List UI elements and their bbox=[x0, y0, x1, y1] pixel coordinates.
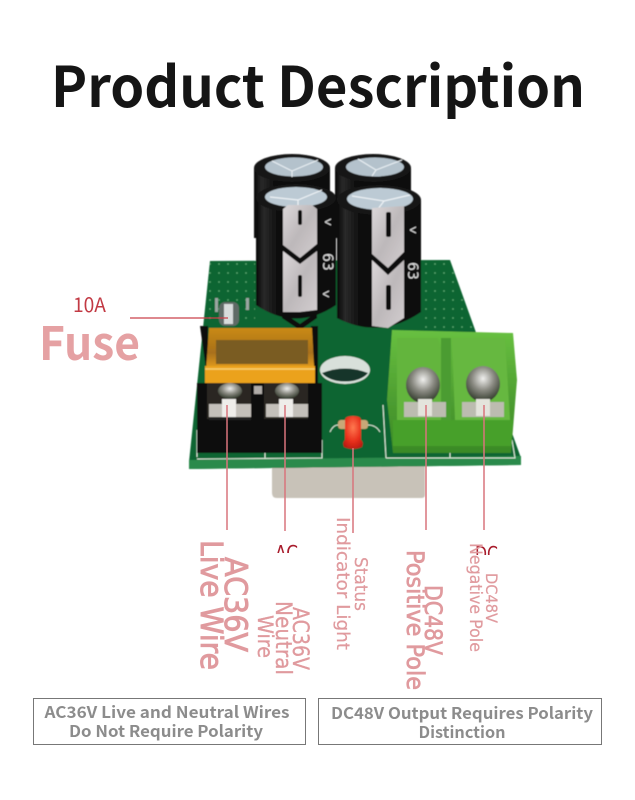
label: AC36V Neutral Wire bbox=[253, 601, 312, 675]
capacitor: front left: 63 bbox=[319, 253, 335, 271]
capacitor: front right: 63 bbox=[404, 262, 420, 280]
amber terminal cover bbox=[205, 328, 315, 383]
label: Status Indicator Light: Status bbox=[350, 557, 371, 611]
label: DC48V Positive Pole: Positive Pole bbox=[401, 550, 429, 690]
note box: DC polarity: DC48V Output Requires Polarity bbox=[331, 700, 593, 724]
silkscreen outlines bbox=[197, 405, 515, 459]
title: Product Description bbox=[51, 43, 585, 124]
green DC terminal block bbox=[387, 330, 517, 453]
product photo: power board bbox=[189, 154, 521, 498]
leader line: DC48V negative bbox=[483, 405, 485, 530]
circuit board bbox=[189, 260, 521, 469]
capacitor: front right bbox=[337, 185, 421, 328]
label: AC36V Neutral Wire: Wire bbox=[253, 615, 277, 658]
note box: DC polarity bbox=[318, 698, 602, 744]
capacitor: back left bbox=[254, 154, 330, 238]
note box: DC polarity: Distinction bbox=[418, 719, 506, 743]
label: clipped AC: AC bbox=[275, 541, 298, 565]
leader line: AC36V live bbox=[226, 405, 228, 530]
label: Status Indicator Light bbox=[332, 517, 371, 650]
status LED bbox=[330, 416, 380, 449]
leader line: status light bbox=[352, 448, 354, 533]
label: DC48V Negative Pole: DC48V bbox=[482, 573, 501, 623]
capacitor: back right bbox=[335, 154, 411, 238]
label: clipped DC: DC bbox=[475, 542, 498, 566]
label: DC48V Positive Pole bbox=[401, 550, 447, 690]
label: AC36V Live Wire: Live Wire bbox=[193, 540, 228, 670]
mounting hole bbox=[320, 356, 370, 384]
note box: AC polarity: Do Not Require Polarity bbox=[69, 718, 263, 742]
leader line: AC36V neutral bbox=[284, 405, 286, 531]
black AC terminal block bbox=[197, 326, 322, 453]
label: DC48V Positive Pole: DC48V bbox=[419, 585, 447, 655]
label: AC36V Neutral Wire: Neutral bbox=[270, 601, 295, 675]
label: Status Indicator Light: Indicator Light bbox=[332, 517, 353, 650]
label: 10A: 10A bbox=[73, 289, 107, 318]
board dots bbox=[205, 261, 474, 330]
note box: AC polarity: AC36V Live and Neutral Wires bbox=[43, 699, 290, 723]
board front edge bbox=[189, 456, 521, 469]
label: AC36V Live Wire bbox=[193, 540, 253, 670]
label: AC36V Live Wire: AC36V bbox=[217, 557, 253, 652]
leader line: fuse bbox=[130, 317, 228, 319]
label: DC48V Negative Pole: Negative Pole bbox=[465, 543, 485, 652]
leader line: DC48V positive bbox=[425, 405, 427, 530]
label: Fuse: Fuse bbox=[39, 308, 140, 374]
note box: AC polarity bbox=[34, 698, 306, 744]
heat sink bbox=[272, 466, 425, 498]
label: AC36V Neutral Wire: AC36V bbox=[287, 607, 312, 670]
glass fuse bbox=[215, 298, 249, 326]
label: DC48V Negative Pole bbox=[465, 543, 501, 652]
capacitor: front left bbox=[256, 184, 336, 330]
